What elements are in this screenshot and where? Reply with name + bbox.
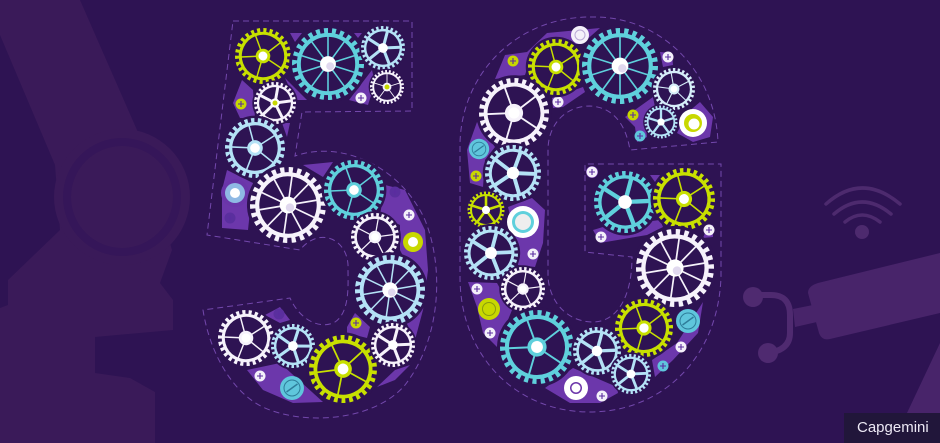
outline of 5: [203, 21, 437, 418]
outline of G: [460, 17, 721, 412]
left robot arm: [0, 0, 190, 443]
logo: Capgemini: Capgemini: [857, 419, 929, 436]
right robot arm: [743, 253, 940, 443]
screws of G: [469, 26, 714, 402]
purple plates of G: [467, 28, 713, 403]
screws of 5: [221, 92, 423, 400]
icon: wifi signal: [826, 188, 900, 239]
gears of G: [455, 25, 725, 400]
gears of 5: [209, 17, 433, 418]
logo: Capgemini: [844, 413, 940, 443]
purple plates of 5: [222, 33, 428, 403]
letter G: [455, 17, 725, 412]
digit 5: [203, 17, 437, 418]
